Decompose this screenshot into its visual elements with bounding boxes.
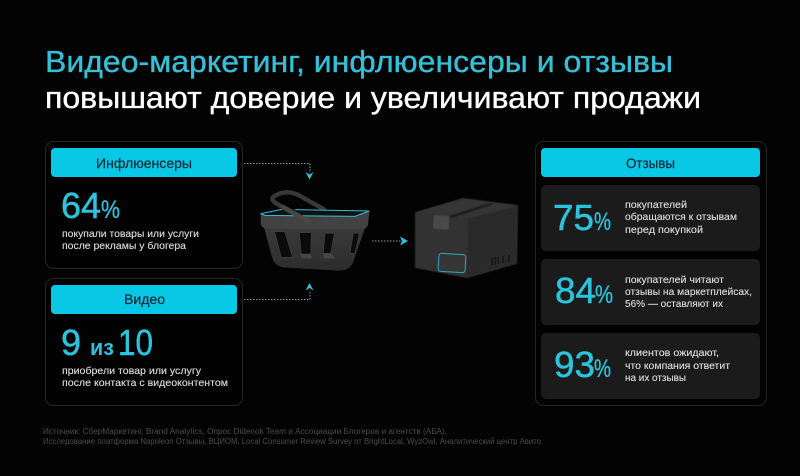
text: influencer description: после рекламы у блогера (62, 240, 186, 252)
stat row: 75%: перед покупкой (625, 224, 703, 236)
title: Видео-маркетинг, инфлюенсеры и отзывы (45, 45, 673, 79)
stat row: 84%: 84 (555, 270, 596, 311)
source footnote (43, 427, 542, 446)
panel: reviews (536, 142, 766, 406)
stat row: 93%: клиентов ожидают, (625, 347, 719, 359)
stat row: 75%: % (594, 208, 611, 236)
stat row: 75%: 75 (553, 197, 594, 238)
source footnote: Исследование платформа Napoleon Отзывы, ВЦИОМ, Local Consumer Review Survey от BrightLocal, WyzOwl, Аналитический центр Авито (43, 437, 542, 446)
stat: 9 of 10: из (90, 335, 114, 360)
stat row: 84%: % (595, 281, 613, 309)
icon: shopping basket (261, 192, 369, 271)
text: video description (62, 365, 228, 389)
stat row: 75%: обращаются к отзывам (625, 211, 737, 223)
stat: 64% (61, 185, 120, 226)
stat: 9 of 10: 9 (61, 322, 81, 363)
stat: 64%: % (101, 196, 120, 224)
stat row: 84%: 56% — оставляют их (625, 298, 724, 310)
stat row: 84%: отзывы на маркетплейсах, (625, 286, 752, 298)
stat row: 93% (541, 333, 760, 399)
arrow: video to basket (244, 283, 314, 300)
text: video description: после контакта с видеоконтентом (62, 377, 228, 389)
title (45, 45, 701, 115)
stat row: 75% (541, 185, 760, 251)
stat: 64%: 64 (61, 185, 101, 226)
stat row: 75%: покупателей (625, 199, 687, 211)
heading: video (51, 285, 237, 314)
source footnote: Источник: СберМаркетинг, Brand Analytics, Опрос Didenok Team и Ассоциации Блогеров и агентств (АБА), (43, 427, 447, 436)
heading: video: Видео (124, 291, 165, 307)
panel: influencers (46, 142, 242, 268)
stat row: 93%: % (594, 355, 611, 383)
stat row: 84% (541, 259, 760, 325)
stat row: 84%: покупателей читают (625, 274, 724, 286)
stat row: 93%: что компания ответит (625, 360, 730, 372)
arrow: basket to parcel (372, 236, 408, 246)
text: influencer description: покупали товары или услуги (62, 228, 199, 240)
heading: influencers (51, 148, 237, 177)
heading: reviews (541, 148, 760, 177)
stat: 9 of 10 (61, 322, 153, 363)
stat row: 93%: 93 (554, 344, 595, 385)
text: video description: приобрели товар или услугу (62, 365, 202, 377)
icon: parcel box (416, 199, 517, 277)
title: повышают доверие и увеличивают продажи (45, 81, 701, 115)
arrow: influencers to basket (244, 164, 314, 180)
heading: reviews: Отзывы (626, 155, 675, 171)
panel: video (46, 278, 242, 406)
stat: 9 of 10: 10 (118, 322, 153, 363)
text: influencer description (62, 228, 199, 252)
heading: influencers: Инфлюенсеры (96, 155, 192, 171)
stat row: 93%: на их отзывы (625, 372, 686, 384)
